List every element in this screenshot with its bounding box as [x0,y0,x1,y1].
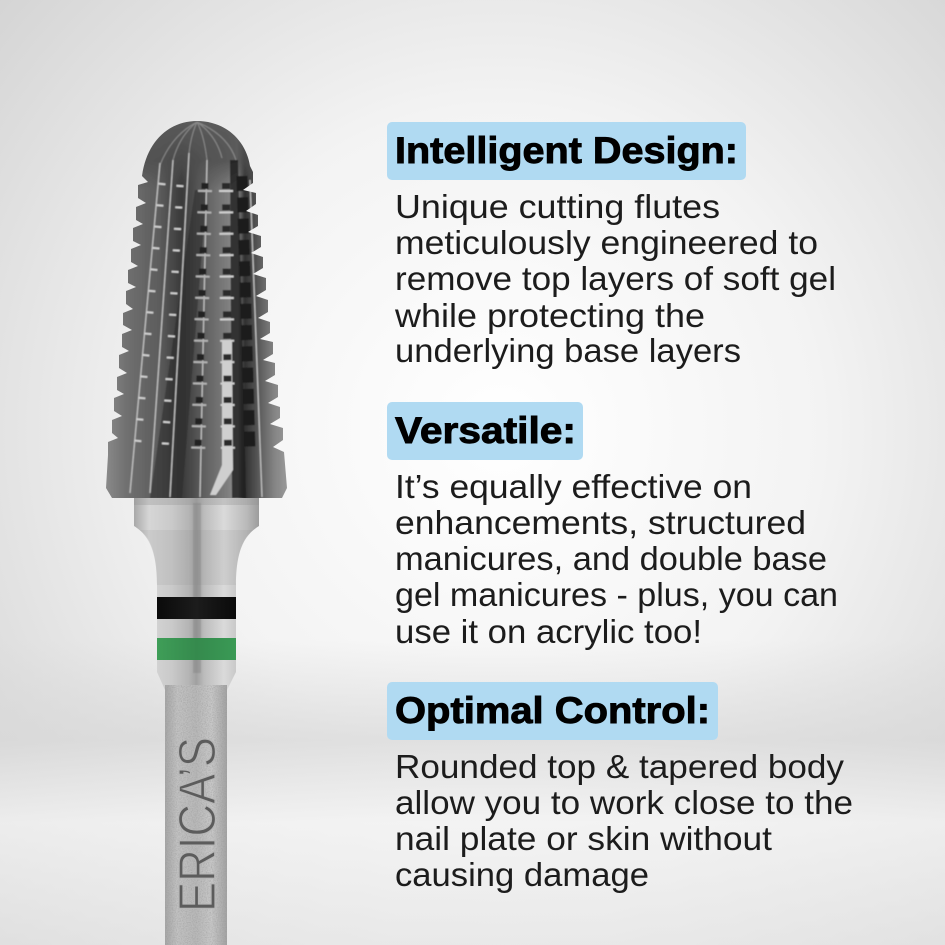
body text: Intelligent Design: underlying base layers [395,332,741,369]
body text: Optimal Control: nail plate or skin without [395,820,772,857]
body text: Versatile: use it on acrylic too! [395,613,702,650]
body text: Intelligent Design: while protecting the [394,297,705,334]
body text: Optimal Control: causing damage [395,856,649,893]
heading: Intelligent Design [387,122,746,180]
heading: Optimal Control: Optimal Control: [395,690,710,731]
body text: Versatile: enhancements, structured [395,504,806,541]
body text: Versatile: gel manicures - plus, you can [395,576,838,613]
body text: Versatile: It’s equally effective on [395,468,752,505]
heading: Optimal Control [387,682,718,740]
body text: Optimal Control: Rounded top & tapered body [395,748,845,785]
black band [157,597,236,619]
heading: Versatile: Versatile: [395,410,576,451]
body text: Versatile: manicures, and double base [395,540,827,577]
body text: Intelligent Design: meticulously engineered to [395,224,818,261]
body text: Optimal Control [395,748,853,893]
shank [134,498,259,945]
heading: Versatile [387,402,583,460]
drill bit [104,119,289,945]
body text: Optimal Control: allow you to work close to the [395,784,853,821]
section: Optimal Control [387,682,853,893]
section: Versatile [387,402,838,650]
body text: Versatile [395,468,838,650]
heading: Intelligent Design: Intelligent Design: [395,130,738,171]
carbide head [104,119,289,500]
green band [157,638,236,660]
body text: Intelligent Design [394,188,836,369]
section: Intelligent Design [387,122,836,369]
body text: Intelligent Design: remove top layers of soft gel [395,260,836,297]
engraved logo text: ERICA’S [169,737,227,912]
body text: Intelligent Design: Unique cutting flutes [395,188,720,225]
